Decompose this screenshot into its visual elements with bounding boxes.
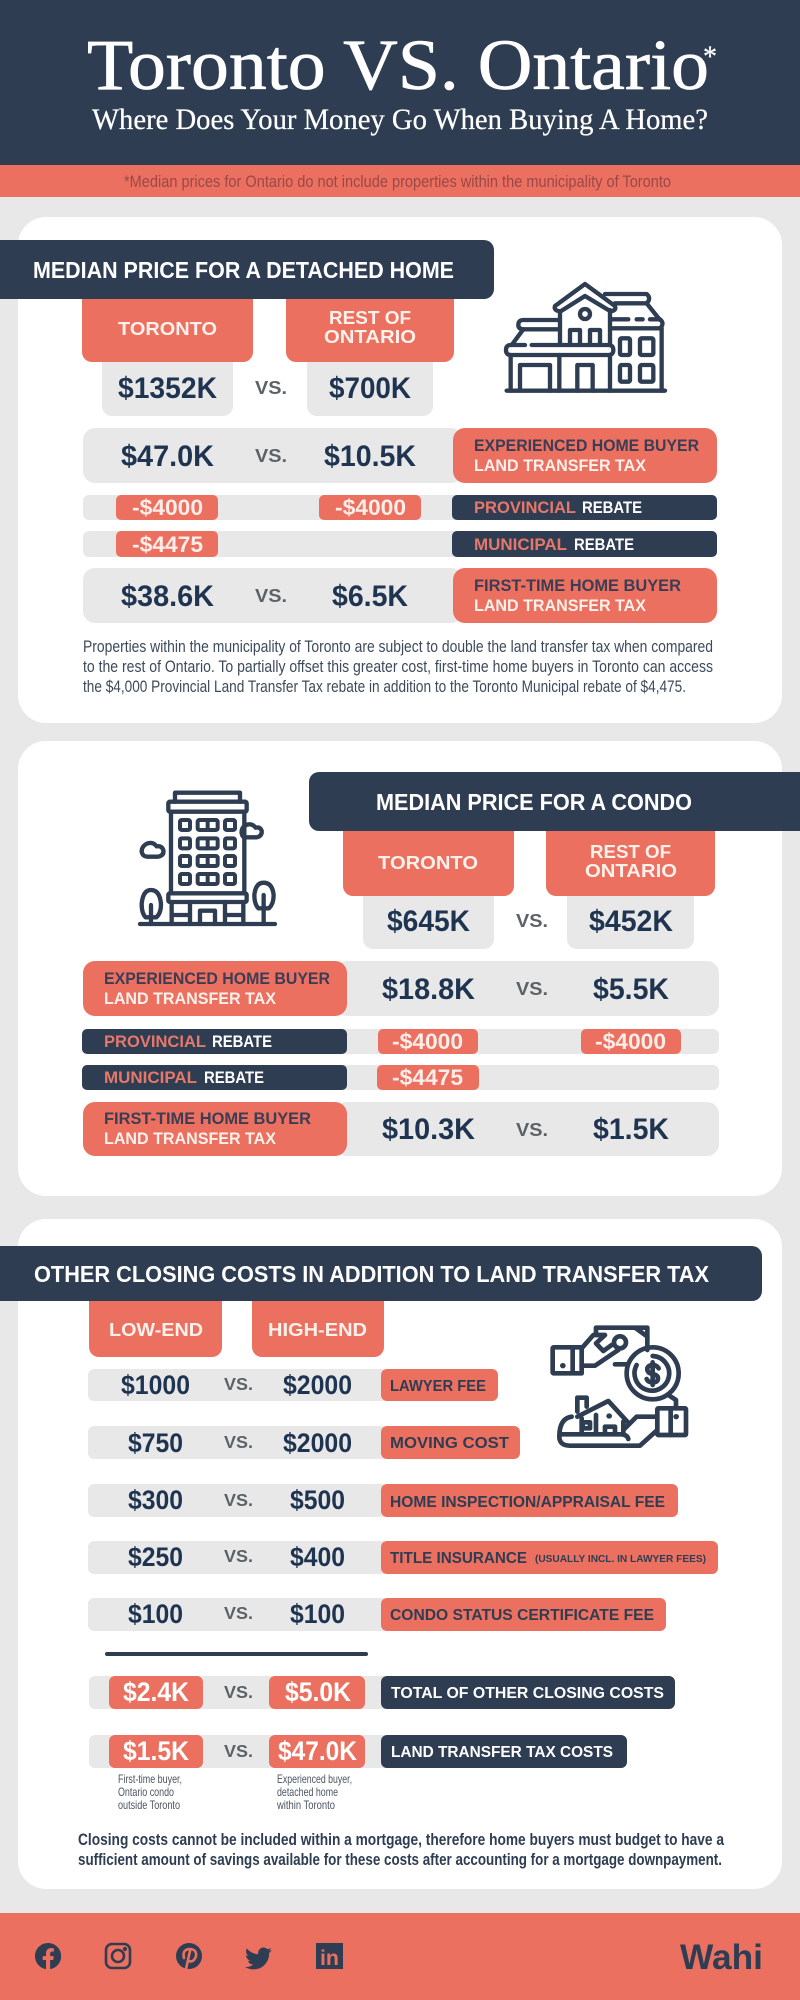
- explanatory paragraph: the $4,000 Provincial Land Transfer Tax rebate in addition to the Toronto Municipal rebate of $4,475.: [83, 678, 686, 696]
- row: experienced buyer land transfer tax: EXPERIENCED HOME BUYER: [474, 436, 699, 455]
- row: total of other closing costs: $2.4K: [123, 1677, 189, 1707]
- icon: money and house exchanged between hands: [553, 1328, 686, 1446]
- row: municipal rebate: REBATE: [204, 1068, 264, 1087]
- vs label: VS.: [255, 378, 287, 398]
- row: total of other closing costs: $5.0K: [285, 1677, 351, 1707]
- row: lawyer fee: $1000: [121, 1370, 190, 1400]
- explanatory paragraph: [83, 638, 713, 696]
- vs label: VS.: [516, 911, 548, 931]
- column header: rest of Ontario: [546, 831, 715, 896]
- row: experienced buyer land transfer tax: $10.5K: [324, 440, 416, 473]
- row: experienced buyer land transfer tax: VS.: [516, 979, 548, 999]
- median price: rest of Ontario: $700K: [329, 372, 411, 405]
- heading: condo: MEDIAN PRICE FOR A CONDO: [376, 789, 692, 815]
- row: total of other closing costs: TOTAL OF OTHER CLOSING COSTS: [391, 1685, 664, 1702]
- note: high-end scenario: within Toronto: [276, 1798, 335, 1812]
- icon: linkedin: in: [320, 1947, 339, 1970]
- row: municipal rebate: -$4475: [132, 532, 203, 557]
- row: provincial rebate: PROVINCIAL: [104, 1032, 206, 1051]
- heading: other closing costs: OTHER CLOSING COSTS IN ADDITION TO LAND TRANSFER TAX: [34, 1261, 710, 1287]
- row: first-time buyer land transfer tax: LAND TRANSFER TAX: [474, 596, 647, 615]
- row: municipal rebate: REBATE: [574, 535, 634, 554]
- row: first-time buyer land transfer tax: $10.3K: [382, 1113, 475, 1146]
- row: home inspection and appraisal fee: $300: [128, 1485, 183, 1515]
- icon: pinterest: [176, 1943, 202, 1969]
- icon: detached house: [506, 284, 665, 391]
- row: title insurance: $250: [128, 1542, 183, 1572]
- icon: facebook: [35, 1943, 61, 1969]
- row: experienced buyer land transfer tax: VS.: [255, 446, 287, 466]
- note: low-end scenario: First-time buyer,: [118, 1772, 182, 1786]
- row: experienced buyer land transfer tax: $47.0K: [121, 440, 214, 473]
- column header: rest of Ontario: ONTARIO: [585, 860, 677, 881]
- column header: rest of Ontario: ONTARIO: [324, 326, 416, 347]
- row: lawyer fee: LAWYER FEE: [390, 1378, 486, 1395]
- icon: linkedin: [316, 1943, 343, 1970]
- median price: Toronto: [363, 896, 494, 949]
- row: first-time buyer land transfer tax: FIRST-TIME HOME BUYER: [474, 576, 681, 595]
- column header: high-end: [252, 1301, 384, 1357]
- note: high-end scenario: Experienced buyer,: [277, 1772, 352, 1786]
- column header: rest of Ontario: [286, 299, 454, 362]
- row: provincial rebate: -$4000: [132, 495, 203, 520]
- heading: condo: [309, 772, 800, 831]
- row: provincial rebate: REBATE: [212, 1032, 272, 1051]
- row: experienced buyer land transfer tax: $18.8K: [382, 973, 475, 1006]
- row: experienced buyer land transfer tax: LAND TRANSFER TAX: [104, 989, 277, 1008]
- note: low-end scenario: outside Toronto: [118, 1798, 180, 1812]
- footer band: [0, 1913, 800, 2000]
- row: provincial rebate: -$4000: [335, 495, 406, 520]
- row: experienced buyer land transfer tax: EXPERIENCED HOME BUYER: [104, 969, 330, 988]
- row: provincial rebate: REBATE: [582, 498, 642, 517]
- row: condo status certificate fee: CONDO STATUS CERTIFICATE FEE: [390, 1607, 654, 1624]
- title: Toronto VS. Ontario: [87, 25, 709, 105]
- row: home inspection and appraisal fee: [88, 1484, 678, 1517]
- note: high-end scenario: [276, 1772, 352, 1812]
- row: land transfer tax costs: $47.0K: [278, 1736, 357, 1766]
- row: land transfer tax costs: VS.: [224, 1741, 253, 1761]
- row: first-time buyer land transfer tax: [83, 568, 717, 623]
- median price: Toronto: [102, 362, 233, 416]
- row: first-time buyer land transfer tax: $6.5K: [332, 580, 408, 613]
- row: moving cost: VS.: [224, 1432, 253, 1452]
- row: moving cost: $2000: [283, 1428, 352, 1458]
- row: condo status certificate fee: $100: [290, 1599, 345, 1629]
- row: land transfer tax costs: $1.5K: [123, 1736, 189, 1766]
- subtitle: Where Does Your Money Go When Buying A Home?: [92, 103, 708, 136]
- row: total of other closing costs: VS.: [224, 1682, 253, 1702]
- row: provincial rebate: PROVINCIAL: [474, 498, 576, 517]
- row: title insurance: VS.: [224, 1546, 253, 1566]
- row: provincial rebate: -$4000: [595, 1029, 666, 1054]
- row: first-time buyer land transfer tax: FIRST-TIME HOME BUYER: [104, 1109, 311, 1128]
- row: home inspection and appraisal fee: HOME INSPECTION/APPRAISAL FEE: [390, 1494, 665, 1511]
- note: high-end scenario: detached home: [277, 1785, 338, 1799]
- row: title insurance: (USUALLY INCL. IN LAWYER FEES): [535, 1553, 706, 1565]
- row: first-time buyer land transfer tax: LAND TRANSFER TAX: [104, 1129, 277, 1148]
- row: first-time buyer land transfer tax: VS.: [516, 1120, 548, 1140]
- median price: rest of Ontario: [567, 896, 694, 949]
- row: experienced buyer land transfer tax: LAND TRANSFER TAX: [474, 456, 647, 475]
- column header: Toronto: TORONTO: [378, 852, 478, 873]
- note: low-end scenario: Ontario condo: [118, 1785, 174, 1799]
- icon: twitter: [245, 1948, 272, 1969]
- column header: high-end: HIGH-END: [268, 1319, 367, 1340]
- row: first-time buyer land transfer tax: $1.5K: [593, 1113, 669, 1146]
- header banner: [0, 0, 800, 165]
- row: first-time buyer land transfer tax: VS.: [255, 586, 287, 606]
- row: municipal rebate: -$4475: [392, 1065, 463, 1090]
- heading: detached home: [0, 240, 494, 299]
- row: moving cost: $750: [128, 1428, 183, 1458]
- closing statement: [78, 1830, 724, 1869]
- heading: detached home: MEDIAN PRICE FOR A DETACHED HOME: [33, 257, 454, 283]
- footnote band: [0, 165, 800, 197]
- row: condo status certificate fee: $100: [128, 1599, 183, 1629]
- row: title insurance: TITLE INSURANCE: [390, 1550, 527, 1567]
- column header: Toronto: [343, 831, 514, 896]
- row: moving cost: [88, 1426, 520, 1459]
- row: lawyer fee: VS.: [224, 1374, 253, 1394]
- heading: other closing costs: [0, 1246, 762, 1301]
- logo: Wahi: Wahi: [680, 1938, 763, 1977]
- row: provincial rebate: [82, 1029, 719, 1054]
- column header: Toronto: TORONTO: [118, 318, 217, 339]
- row: home inspection and appraisal fee: VS.: [224, 1490, 253, 1510]
- panel: detached home: [0, 217, 782, 723]
- row: municipal rebate: [83, 531, 717, 557]
- row: title insurance: [88, 1541, 718, 1574]
- row: lawyer fee: [88, 1369, 498, 1401]
- row: land transfer tax costs: [89, 1735, 627, 1768]
- title asterisk: *: [703, 40, 717, 73]
- row: home inspection and appraisal fee: $500: [290, 1485, 345, 1515]
- icon: instagram: [106, 1944, 130, 1968]
- column header: low-end: [89, 1301, 222, 1357]
- row: municipal rebate: MUNICIPAL: [474, 535, 567, 554]
- row: lawyer fee: $2000: [283, 1370, 352, 1400]
- row: moving cost: MOVING COST: [390, 1435, 510, 1452]
- row: condo status certificate fee: VS.: [224, 1603, 253, 1623]
- row: first-time buyer land transfer tax: $38.6K: [121, 580, 214, 613]
- row: municipal rebate: MUNICIPAL: [104, 1068, 197, 1087]
- row: total of other closing costs: [89, 1676, 675, 1709]
- median price: rest of Ontario: $452K: [589, 905, 673, 938]
- row: experienced buyer land transfer tax: $5.5K: [593, 973, 669, 1006]
- row: land transfer tax costs: LAND TRANSFER TAX COSTS: [391, 1744, 613, 1761]
- icon: condo building: [140, 793, 275, 924]
- row: first-time buyer land transfer tax: [83, 1102, 719, 1156]
- panel: condo: [18, 741, 800, 1196]
- row: experienced buyer land transfer tax: [83, 961, 719, 1016]
- median price: Toronto: $645K: [387, 905, 470, 938]
- panel: other closing costs: [0, 1219, 782, 1889]
- column header: rest of Ontario: REST OF: [590, 841, 671, 862]
- row: title insurance: $400: [290, 1542, 345, 1572]
- column header: low-end: LOW-END: [109, 1319, 203, 1340]
- median price: rest of Ontario: [307, 362, 433, 416]
- row: experienced buyer land transfer tax: [83, 428, 717, 483]
- row: provincial rebate: [83, 495, 717, 520]
- row: condo status certificate fee: [88, 1598, 666, 1631]
- median price: Toronto: $1352K: [118, 372, 217, 405]
- footnote band: *Median prices for Ontario do not include properties within the municipality of Toronto: [124, 173, 671, 191]
- note: low-end scenario: [118, 1772, 182, 1812]
- row: municipal rebate: [82, 1065, 719, 1090]
- column header: rest of Ontario: REST OF: [329, 307, 411, 328]
- column header: Toronto: [82, 299, 253, 362]
- row: provincial rebate: -$4000: [392, 1029, 463, 1054]
